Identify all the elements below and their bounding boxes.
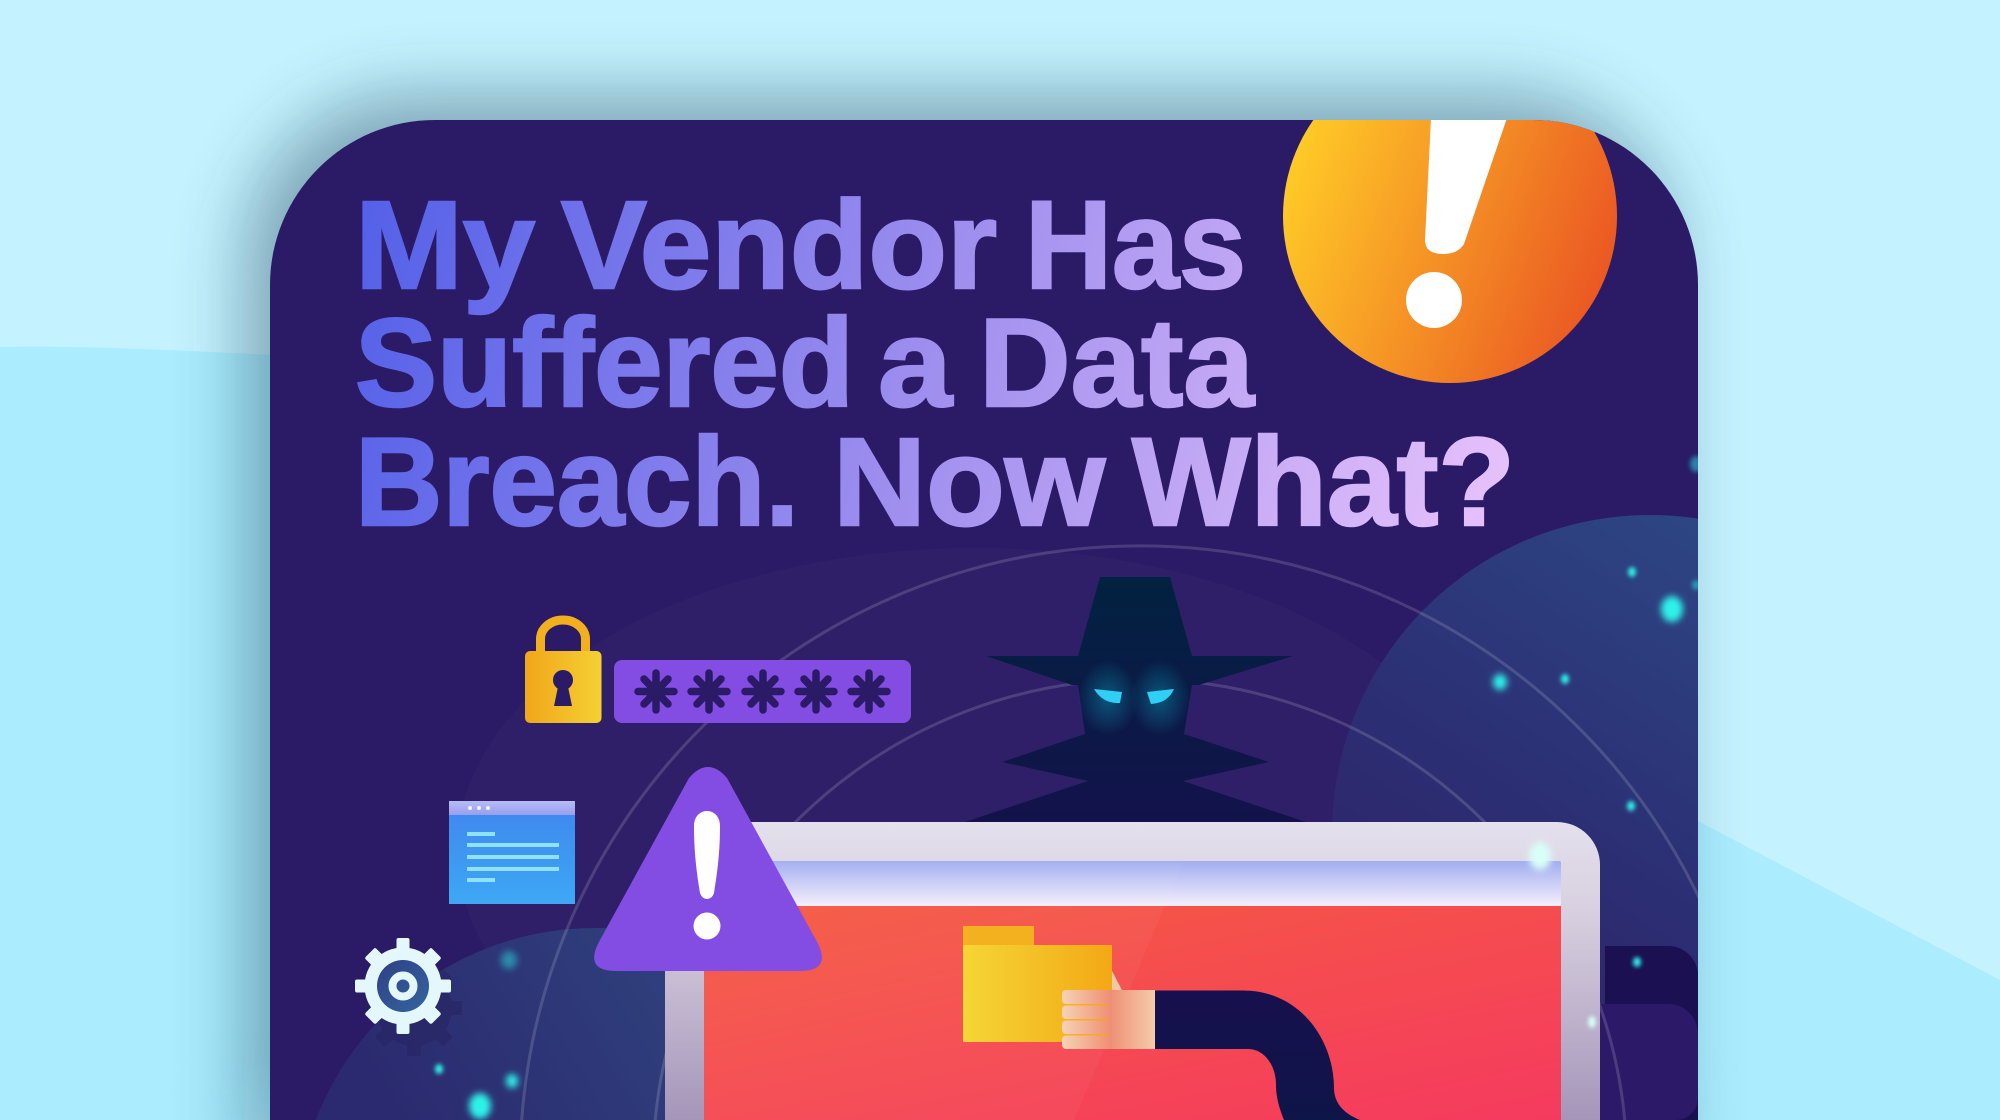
title: Vendor <box>561 176 997 315</box>
icon: browser window <box>449 801 575 904</box>
hand gripping folder <box>1062 971 1155 1049</box>
icon: gear <box>355 938 451 1034</box>
icon: padlock <box>525 620 602 723</box>
title: Breach. <box>355 413 799 552</box>
title: My <box>355 176 535 315</box>
hacker eyes <box>1094 689 1174 704</box>
title: What? <box>1132 413 1515 552</box>
blue circle right with particles <box>1332 515 1698 1004</box>
title: Has <box>1025 176 1246 315</box>
title: Suffered <box>355 294 854 433</box>
hacker eye glow <box>1082 665 1186 731</box>
masked password asterisks <box>638 673 887 710</box>
title <box>357 196 1509 528</box>
background: lower blue wave <box>0 347 2000 1120</box>
blue circle lower left <box>316 928 665 1120</box>
monitor <box>665 822 1600 1120</box>
hacker silhouette <box>965 577 1306 822</box>
icon: gear shadow <box>376 970 462 1056</box>
folder held by hand <box>963 926 1112 1042</box>
lower panel at right edge <box>1590 1004 1698 1120</box>
icon: purple warning triangle <box>594 767 822 971</box>
card shadow <box>245 95 1673 1120</box>
screen reflection <box>704 861 1184 1120</box>
panel: main dark card <box>270 120 1698 1120</box>
title: a <box>878 294 954 433</box>
monitor title band <box>704 861 1561 906</box>
radar rings <box>522 546 1758 1120</box>
title: Data <box>979 294 1256 433</box>
password field <box>614 660 911 723</box>
monitor red screen <box>704 906 1561 1120</box>
title: Now <box>833 413 1106 552</box>
hacker arm <box>1155 990 1360 1120</box>
faint lighter backdrop circle <box>457 548 1493 1120</box>
icon: orange alert circle <box>1283 120 1617 383</box>
dark cable box at right edge <box>1605 946 1698 1120</box>
glowing particles <box>435 456 1702 1119</box>
